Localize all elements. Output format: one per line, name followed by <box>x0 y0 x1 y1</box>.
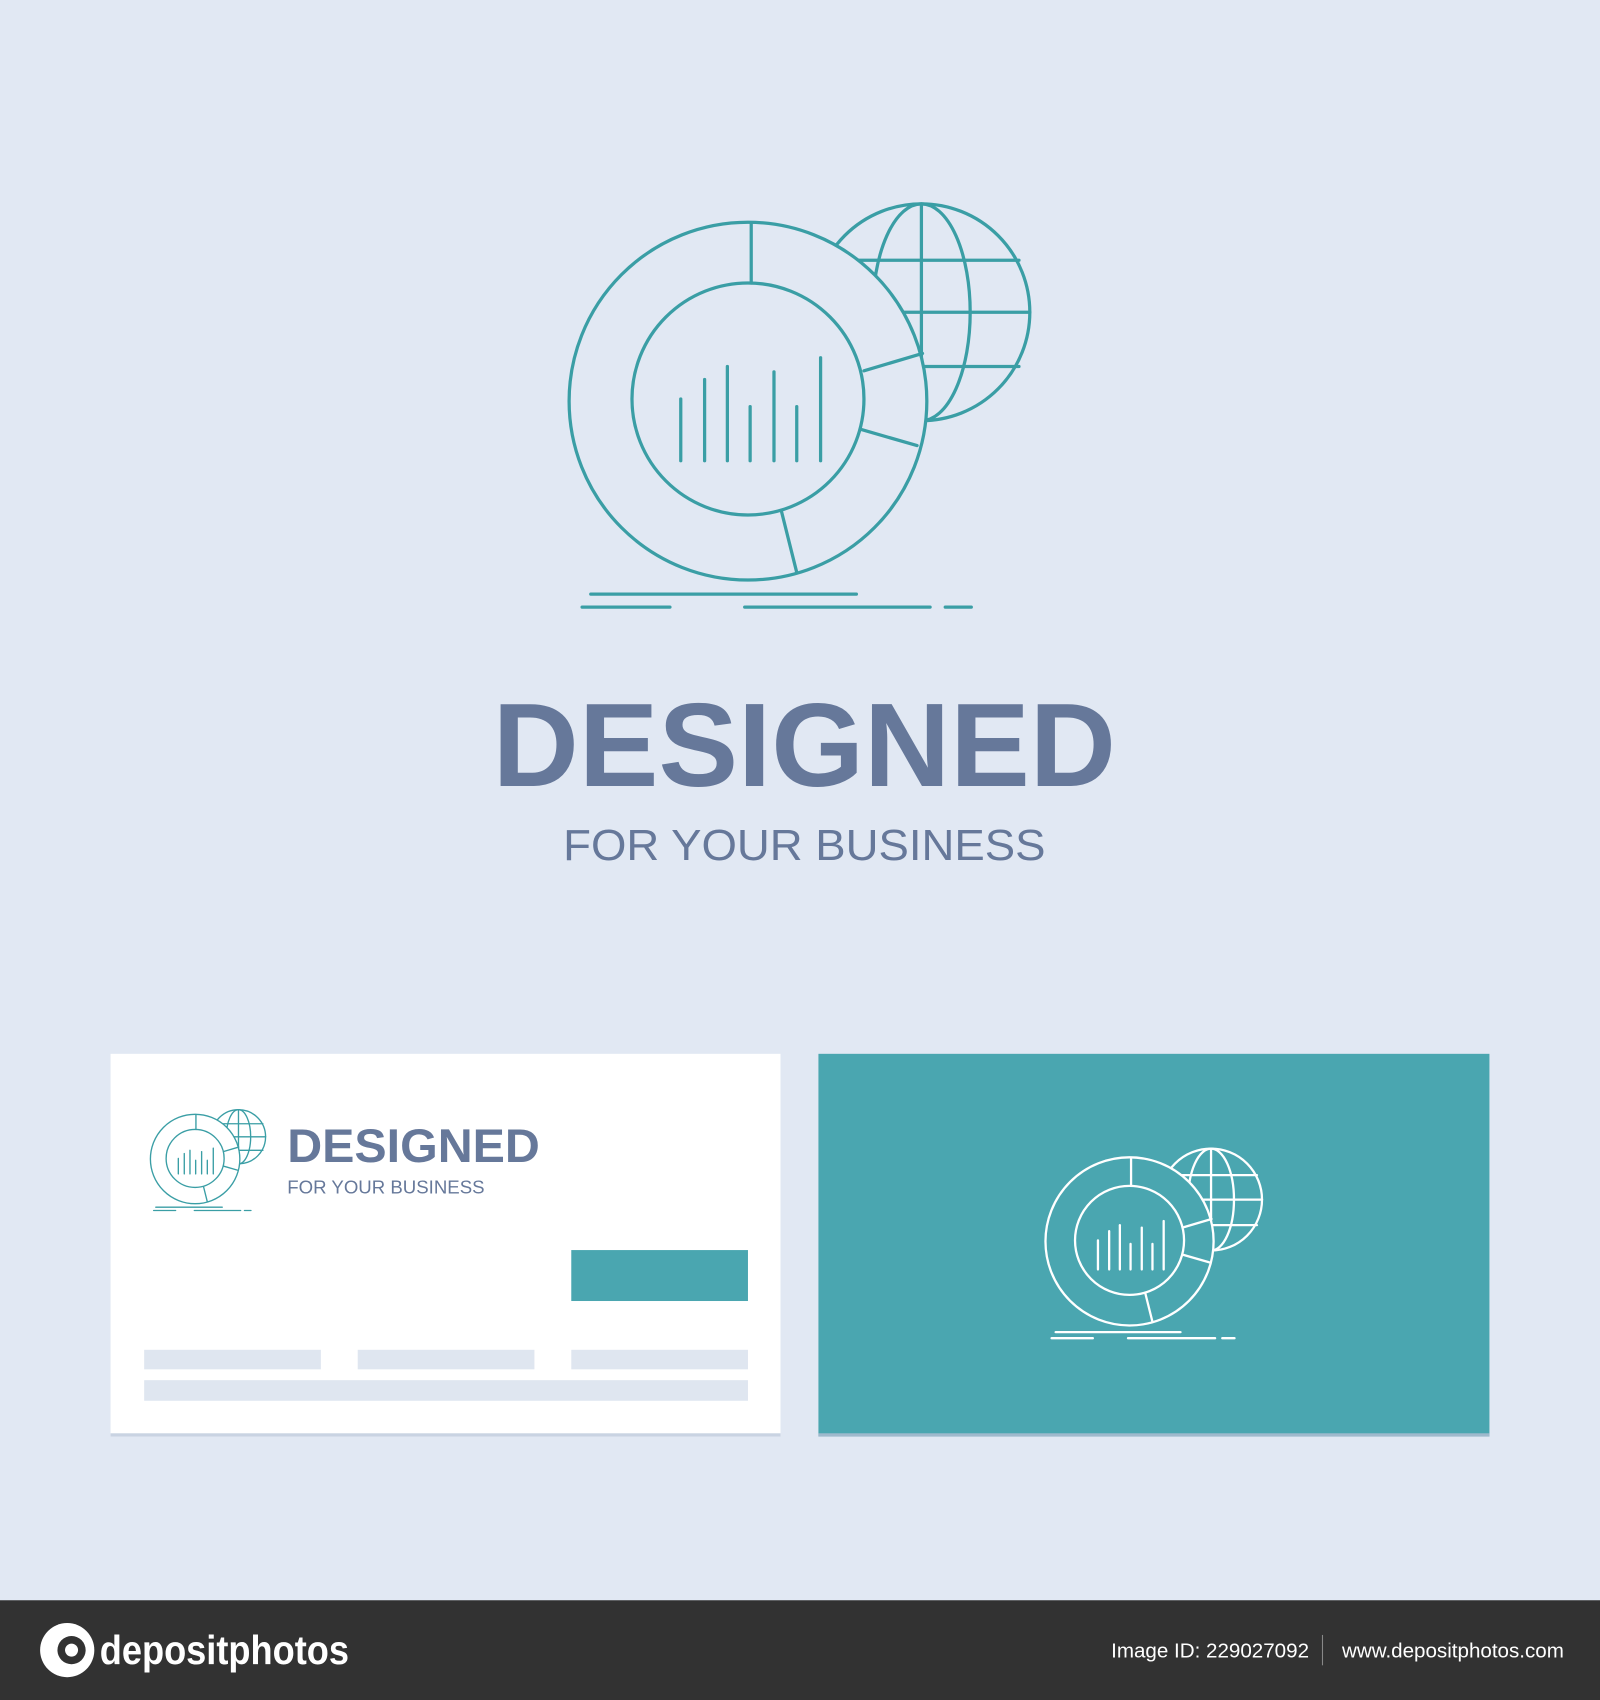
footer url: www.depositphotos.com <box>1341 1640 1564 1663</box>
footer bar <box>0 1600 1600 1700</box>
panel: white business card <box>111 1054 780 1437</box>
icon: depositphotos logo <box>40 1623 94 1677</box>
panel: teal business card <box>818 1054 1489 1437</box>
icon: small logo <box>150 1110 266 1210</box>
icon: white logo <box>1045 1149 1262 1338</box>
icon: big data pie chart with globe <box>569 204 1030 607</box>
subtitle: FOR YOUR BUSINESS <box>563 822 1046 870</box>
title: DESIGNED <box>493 679 1116 812</box>
card title: DESIGNED <box>287 1120 540 1173</box>
footer image id: Image ID: 229027092 <box>1111 1640 1309 1663</box>
placeholder bars <box>144 1350 748 1401</box>
teal button <box>571 1250 748 1301</box>
footer brand: depositphotos <box>100 1627 349 1673</box>
card subtitle: FOR YOUR BUSINESS <box>287 1177 485 1198</box>
